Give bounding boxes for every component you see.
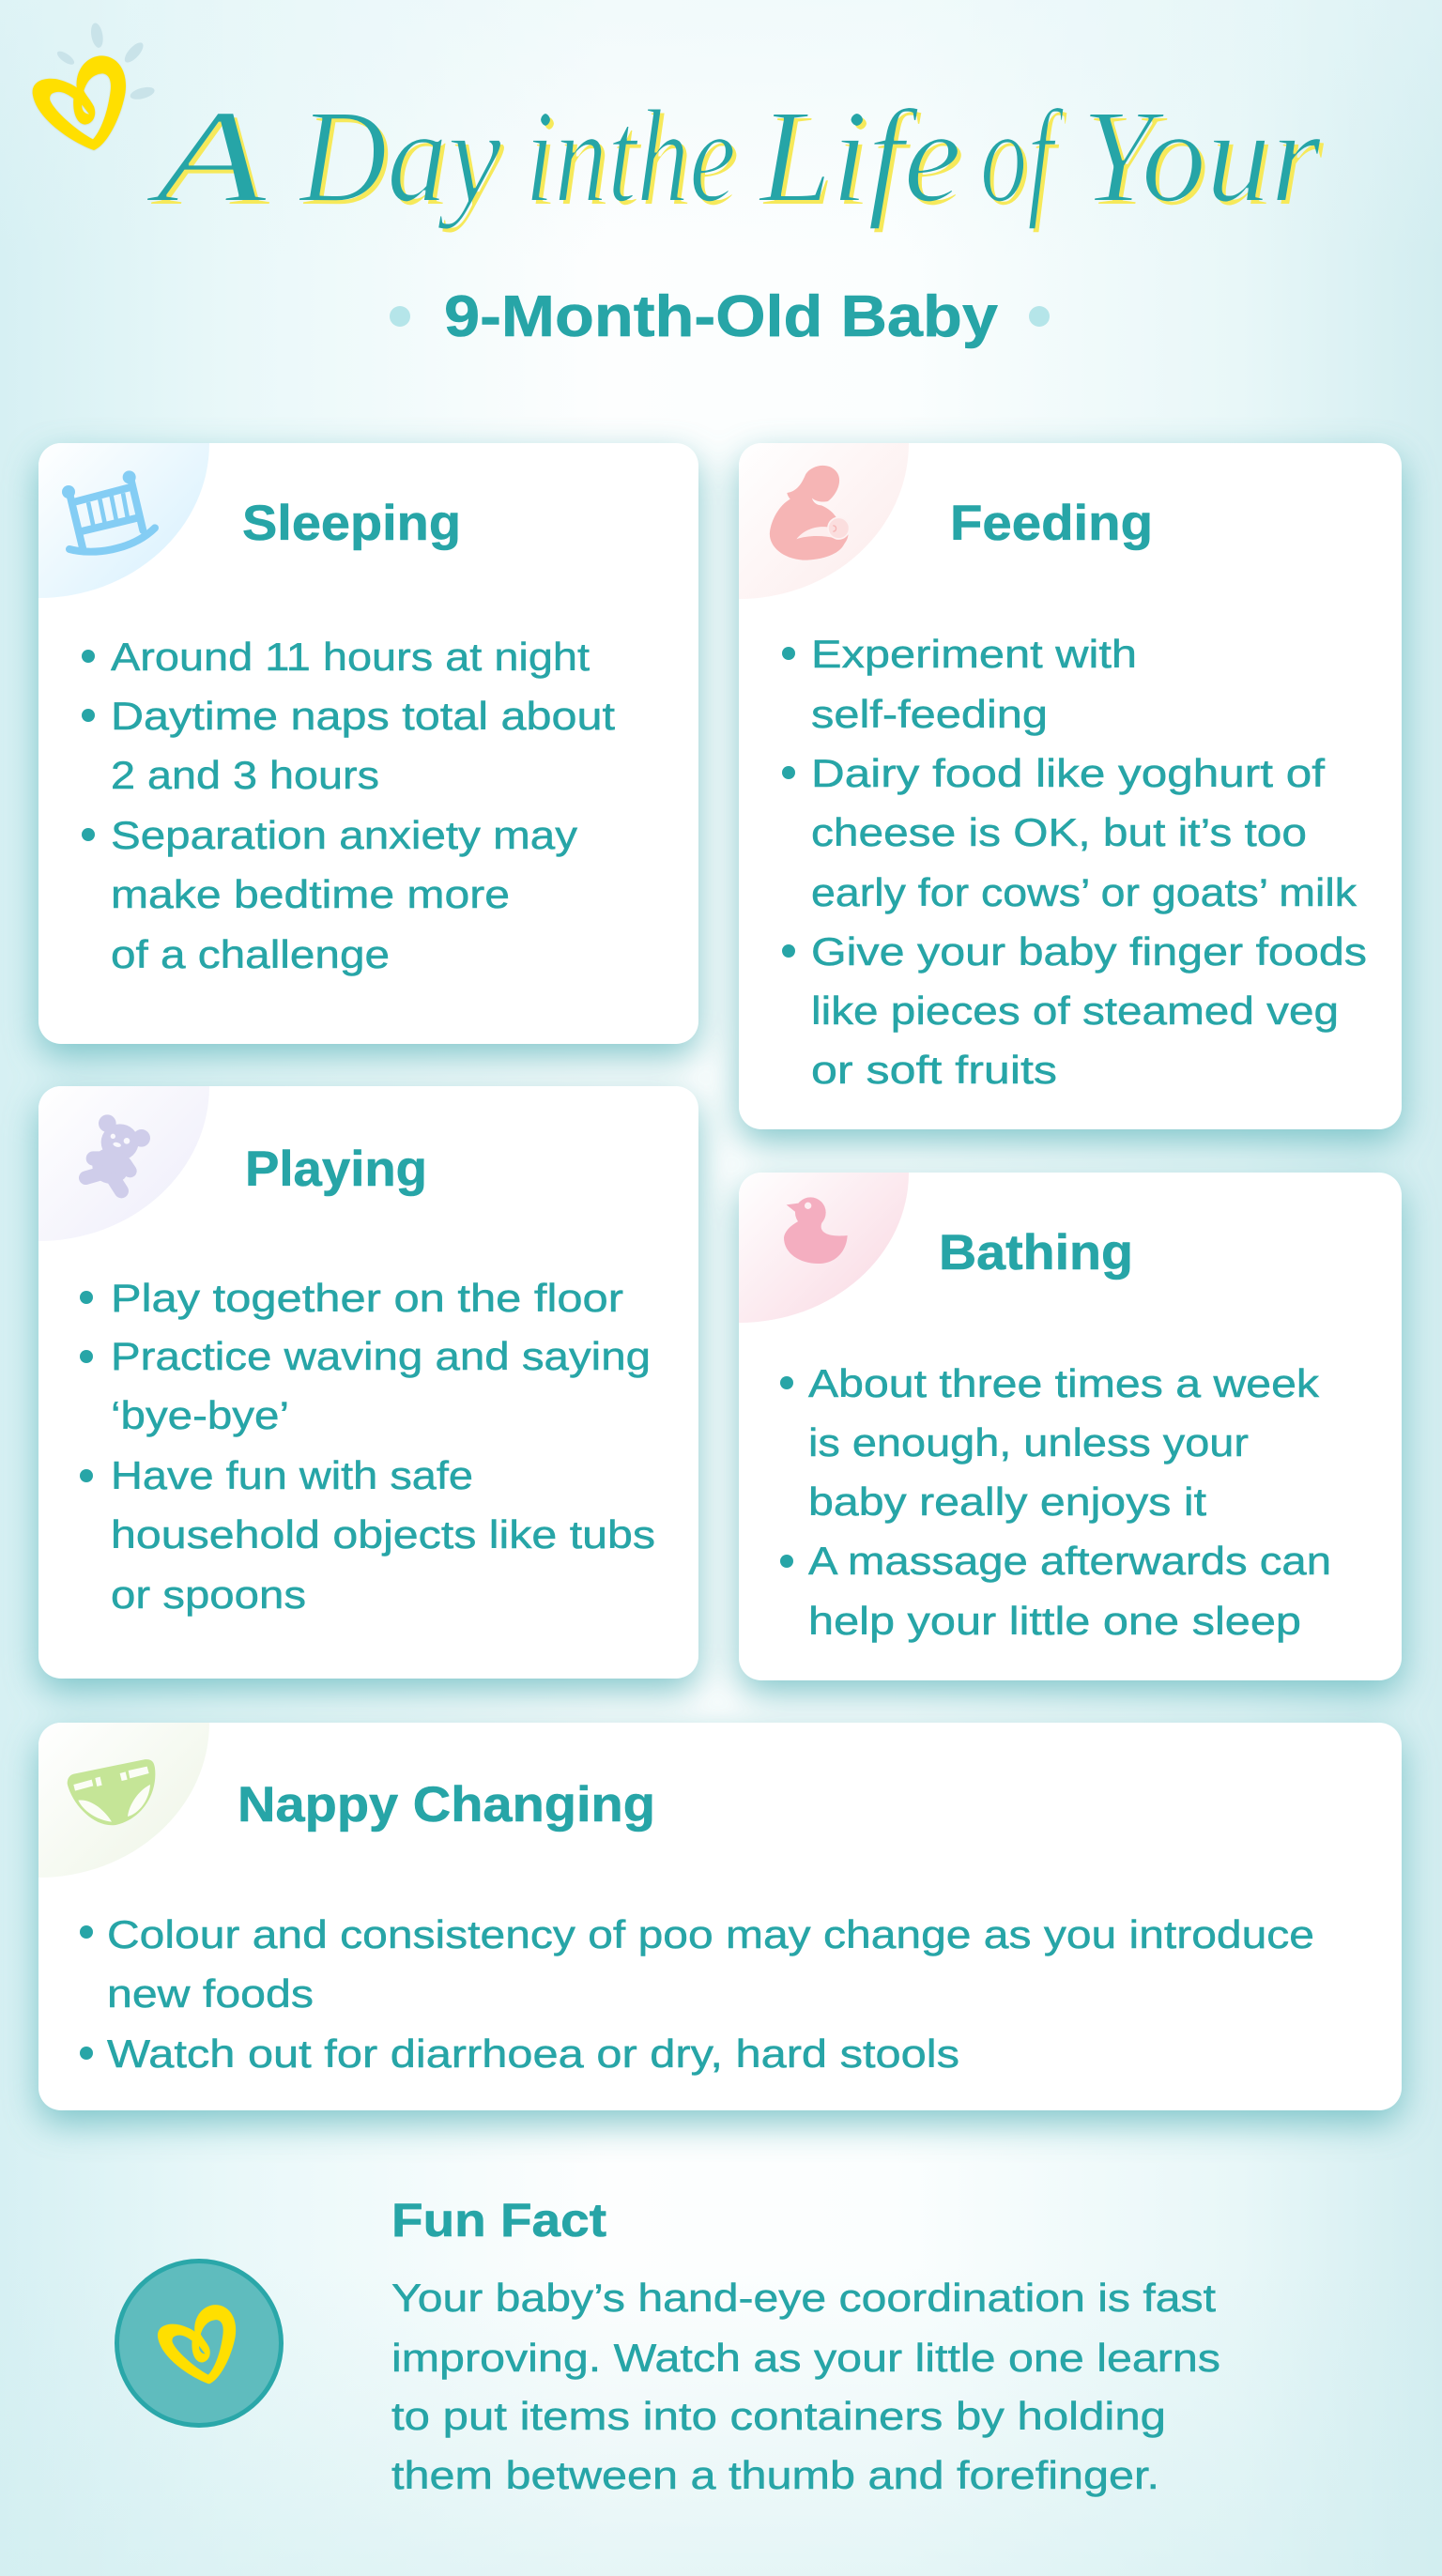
- list: playing: [80, 1276, 655, 1617]
- list: feeding: early for cows’ or goats’ milk: [811, 870, 1358, 914]
- title: of: [984, 85, 1068, 234]
- icon: mother and baby: [770, 466, 850, 560]
- title: the: [607, 82, 736, 230]
- list: feeding: self-feeding: [811, 692, 1048, 736]
- heading: Feeding: Feeding: [950, 496, 1153, 551]
- list: feeding: cheese is OK, but it’s too: [811, 810, 1307, 854]
- panel: nappy changing: [38, 1723, 1402, 2110]
- list: sleeping: Around 11 hours at night: [111, 635, 590, 679]
- list: feeding: Experiment with: [811, 632, 1137, 676]
- list: sleeping: Daytime naps total about: [111, 694, 615, 738]
- list: playing: household objects like tubs: [111, 1512, 655, 1556]
- title: Day: [298, 82, 502, 230]
- list: nappy changing: Colour and consistency of poo may change as you introduce: [107, 1912, 1314, 1956]
- list: sleeping: [82, 635, 615, 976]
- list: nappy changing: Watch out for diarrhoea or dry, hard stools: [107, 2032, 959, 2076]
- icon: teal circle with heart: [116, 2261, 282, 2426]
- icon: nappy: [68, 1759, 155, 1825]
- text: fun fact body: [391, 2276, 1220, 2497]
- heading: Fun Fact: Fun Fact: [391, 2194, 606, 2246]
- icon: rubber duck: [784, 1197, 848, 1264]
- subtitle with dots: 9-Month-Old Baby: [444, 284, 999, 349]
- title: in: [529, 85, 611, 234]
- list: bathing: help your little one sleep: [808, 1599, 1301, 1643]
- panel: feeding: [739, 443, 1402, 1129]
- title: Day: [301, 85, 506, 234]
- list: nappy changing: new foods: [107, 1971, 314, 2016]
- text: fun fact body: Your baby’s hand-eye coordination is fast: [391, 2276, 1216, 2320]
- list: sleeping: 2 and 3 hours: [111, 753, 379, 797]
- heading: Playing: Playing: [245, 1142, 427, 1197]
- panel: fun fact: [116, 2194, 1220, 2497]
- title: A: [146, 82, 268, 230]
- list: sleeping: Separation anxiety may: [111, 813, 577, 857]
- icon: teddy bear: [85, 1114, 150, 1191]
- title: the: [611, 85, 740, 234]
- list: feeding: like pieces of steamed veg: [811, 989, 1339, 1033]
- list: playing: or spoons: [111, 1572, 306, 1617]
- text: fun fact body: them between a thumb and forefinger.: [391, 2453, 1159, 2497]
- list: bathing: About three times a week: [808, 1361, 1320, 1405]
- list: feeding: or soft fruits: [811, 1048, 1057, 1092]
- list: feeding: Give your baby finger foods: [811, 929, 1367, 974]
- panel: playing: [38, 1086, 698, 1679]
- panel: bathing: [739, 1173, 1402, 1680]
- panel: sleeping: [38, 443, 698, 1044]
- title: Life: [758, 82, 961, 230]
- title: of: [980, 82, 1065, 230]
- title: Life: [761, 85, 965, 234]
- heading: Bathing: Bathing: [939, 1225, 1133, 1280]
- title: [146, 82, 1326, 234]
- text: fun fact body: improving. Watch as your little one learns: [391, 2336, 1220, 2380]
- logo: yellow heart with rays: [33, 22, 156, 150]
- list: playing: ‘bye-bye’: [111, 1393, 289, 1437]
- list: playing: Play together on the floor: [111, 1276, 623, 1320]
- list: feeding: [782, 632, 1367, 1092]
- list: bathing: is enough, unless your: [808, 1420, 1249, 1464]
- heading: Sleeping: Sleeping: [242, 496, 461, 551]
- icon: crib: [62, 470, 155, 552]
- list: bathing: [780, 1361, 1331, 1643]
- heading: Nappy Changing: Nappy Changing: [238, 1777, 655, 1832]
- title: Your: [1085, 85, 1326, 234]
- text: fun fact body: to put items into containers by holding: [391, 2394, 1166, 2438]
- title: A: [149, 85, 272, 234]
- title: Your: [1082, 82, 1322, 230]
- title: in: [525, 82, 607, 230]
- list: feeding: Dairy food like yoghurt of: [811, 751, 1325, 795]
- list: sleeping: make bedtime more: [111, 872, 510, 916]
- list: nappy changing: [80, 1912, 1314, 2076]
- list: playing: Practice waving and saying: [111, 1334, 651, 1378]
- list: bathing: baby really enjoys it: [808, 1480, 1206, 1524]
- list: playing: Have fun with safe: [111, 1453, 473, 1497]
- list: bathing: A massage afterwards can: [808, 1539, 1331, 1583]
- list: sleeping: of a challenge: [111, 932, 390, 976]
